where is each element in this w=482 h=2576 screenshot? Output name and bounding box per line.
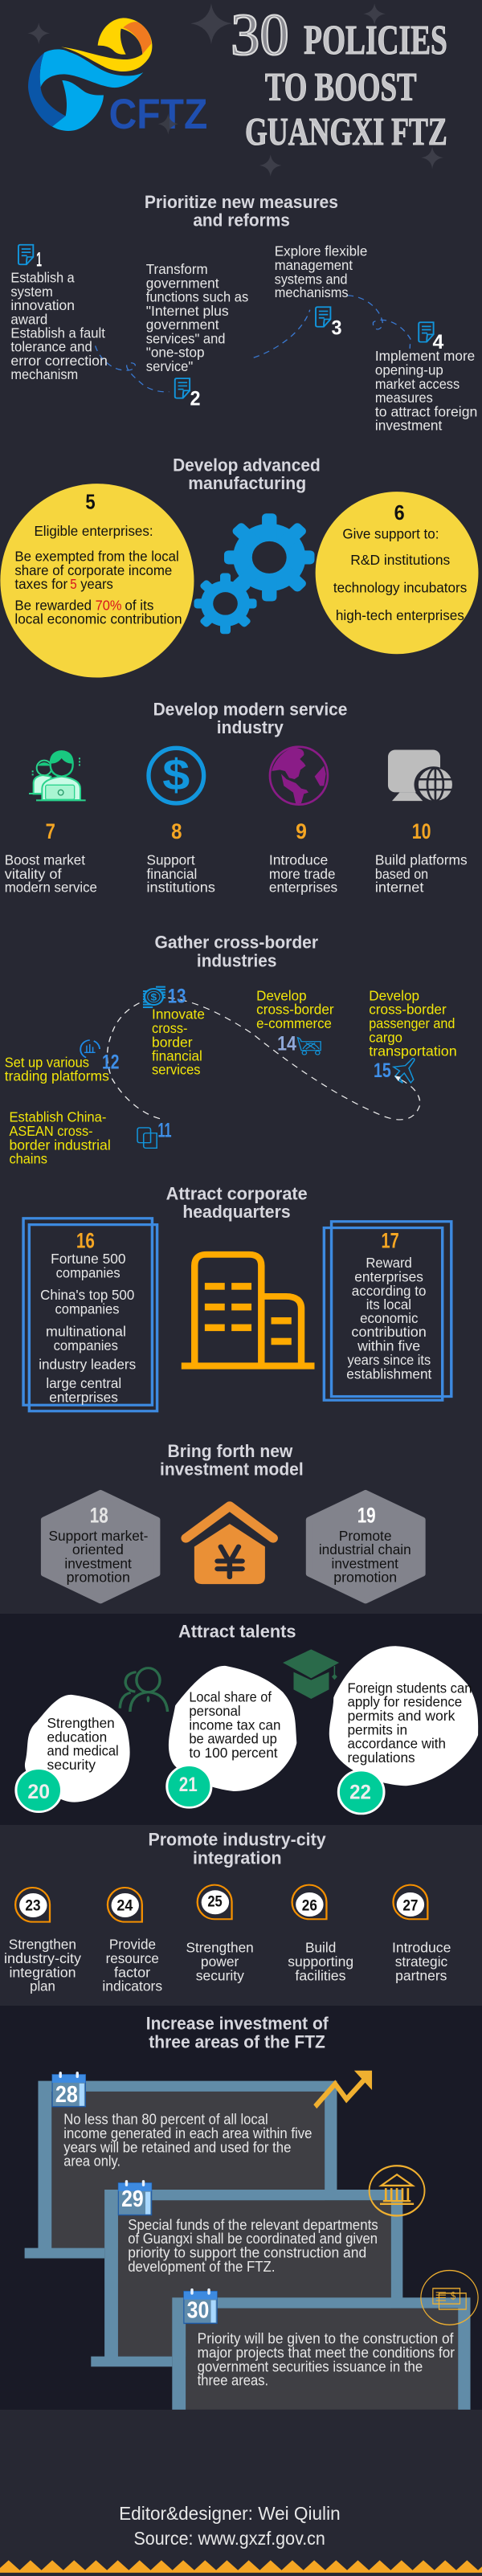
panel: policy 16: 16 bbox=[76, 1228, 95, 1252]
dashed connectors bbox=[96, 296, 411, 392]
item 3 bbox=[275, 243, 367, 339]
policy 27 bbox=[392, 1885, 451, 1984]
policy 11: 11 bbox=[157, 1118, 172, 1141]
item 2 bbox=[146, 262, 248, 410]
panel: policy 16: companies bbox=[56, 1264, 120, 1280]
panel: policy 16: companies bbox=[55, 1300, 119, 1317]
title bbox=[231, 2, 447, 153]
decorative stars bbox=[27, 3, 443, 177]
item 2: Transform bbox=[146, 262, 208, 278]
bubble: policy 21: be awarded up bbox=[189, 1731, 277, 1747]
logo: CFTZ swirl bbox=[28, 18, 207, 138]
panel: policy 30: government securities issuance in the bbox=[198, 2358, 423, 2375]
panel: policy 16: companies bbox=[54, 1337, 118, 1353]
icon: office buildings bbox=[182, 1255, 315, 1370]
item 4: opening-up bbox=[375, 363, 443, 378]
hexagon: policy 18: investment bbox=[64, 1555, 133, 1571]
heading: bring forth new investment model: investment model bbox=[160, 1459, 304, 1479]
service icons row bbox=[29, 747, 328, 805]
yellow circle: policy 5: of its bbox=[125, 597, 153, 613]
panel: policy 29: priority to support the construction and bbox=[128, 2244, 366, 2261]
bubble: policy 21 bbox=[167, 1666, 296, 1807]
policy 26 bbox=[288, 1885, 353, 1984]
bubble: policy 21: to 100 percent bbox=[189, 1745, 278, 1762]
item 4: investment bbox=[375, 418, 443, 434]
panel: policy 29: Special funds of the relevant departments bbox=[128, 2217, 378, 2233]
policy 9: 9 bbox=[296, 819, 307, 843]
policy 23: industry-city bbox=[4, 1950, 81, 1967]
item 2: government bbox=[146, 317, 219, 333]
yellow circle: policy 6: R&D institutions bbox=[350, 552, 450, 568]
last lines of service policies bbox=[5, 880, 424, 896]
policy 26: supporting bbox=[288, 1953, 353, 1970]
policy 25: power bbox=[201, 1953, 239, 1970]
policy 14: 14 bbox=[277, 1031, 297, 1055]
item 4: market access bbox=[375, 377, 460, 393]
policy 11: border industrial bbox=[9, 1137, 111, 1153]
item 4: 4 bbox=[432, 330, 444, 353]
policy 15: cross-border bbox=[369, 1002, 447, 1018]
yellow circle: policy 5: Eligible enterprises: bbox=[34, 523, 153, 539]
heading: gather cross-border industries: industries bbox=[197, 952, 276, 971]
policy 15 bbox=[369, 988, 457, 1083]
bubble: policy 22: 22 bbox=[349, 1780, 371, 1803]
policy 25 bbox=[186, 1885, 254, 1984]
panel: policy 17 bbox=[324, 1222, 451, 1400]
bubble: policy 21: income tax can bbox=[189, 1717, 280, 1733]
heading: prioritize new measures: and reforms bbox=[193, 210, 290, 230]
bubble: policy 22: permits and work bbox=[347, 1708, 455, 1725]
policy 25: 25 bbox=[207, 1893, 223, 1910]
icon: bank bbox=[370, 2166, 425, 2215]
section: cross-border industries bbox=[5, 880, 457, 1167]
policy 26: 26 bbox=[302, 1897, 317, 1914]
bubble: policy 22 bbox=[329, 1646, 478, 1814]
credits bbox=[119, 2505, 341, 2549]
panel: policy 17: establishment bbox=[346, 1366, 432, 1382]
icon: rising arrow bbox=[315, 2071, 372, 2107]
heading: bring forth new investment model: Bring forth new bbox=[168, 1441, 293, 1461]
heading: develop advanced manufacturing: Develop advanced bbox=[173, 455, 321, 475]
panel: policy 17: years since its bbox=[347, 1351, 431, 1368]
panel: policy 30: Priority will be given to the construction of bbox=[198, 2330, 454, 2347]
panel: policy 16: multinational bbox=[46, 1323, 126, 1339]
bubble: policy 22: accordance with bbox=[347, 1736, 446, 1752]
heading: attract corporate headquarters bbox=[166, 1183, 308, 1222]
policy 15: 15 bbox=[374, 1059, 391, 1082]
dashed route bbox=[108, 998, 420, 1120]
item 4 bbox=[375, 322, 477, 434]
item 3: mechanisms bbox=[275, 285, 349, 301]
yellow circle: policy 5: Be rewarded bbox=[14, 597, 92, 613]
item 1: innovation bbox=[10, 298, 75, 314]
hexagon: policy 19 bbox=[309, 1493, 423, 1601]
item 2: 2 bbox=[190, 387, 201, 410]
policy 13 bbox=[143, 984, 205, 1078]
policy 24: factor bbox=[114, 1964, 151, 1981]
policy 9: Introduce bbox=[269, 851, 328, 868]
policy 23: 23 bbox=[25, 1897, 41, 1914]
policy 24: indicators bbox=[102, 1978, 162, 1994]
policy 11: chains bbox=[9, 1151, 47, 1167]
panel: policy 29: 29 bbox=[121, 2186, 144, 2212]
icon: dollar bbox=[149, 748, 204, 803]
policy 23: plan bbox=[30, 1978, 55, 1994]
policy 23 bbox=[4, 1888, 81, 1994]
hexagon: policy 19: Promote bbox=[339, 1527, 392, 1544]
panel: policy 30: three areas. bbox=[198, 2372, 268, 2389]
policy 7: vitality of bbox=[5, 865, 62, 882]
yellow circle: policy 5: 5 bbox=[85, 490, 96, 513]
panel: policy 17: according to bbox=[352, 1282, 426, 1299]
policy 10 bbox=[375, 819, 468, 882]
yellow circle: policy 5: share of corporate income bbox=[14, 562, 172, 578]
policy 13: border bbox=[152, 1035, 193, 1051]
panel: policy 17: its local bbox=[366, 1296, 411, 1312]
panel: policy 17: Reward bbox=[366, 1254, 412, 1271]
heading: attract corporate headquarters: headquarters bbox=[182, 1202, 291, 1222]
policy 15: Develop bbox=[369, 988, 419, 1004]
item 2: functions such as bbox=[146, 290, 248, 305]
policy 13: services bbox=[152, 1062, 201, 1078]
hexagon: policy 19: industrial chain bbox=[319, 1541, 411, 1557]
policy 26: Build bbox=[305, 1940, 336, 1956]
panel: policy 28: area only. bbox=[63, 2153, 120, 2170]
hexagon: policy 19: investment bbox=[332, 1555, 399, 1571]
policy 23: integration bbox=[9, 1964, 76, 1981]
heading: increase investment bbox=[146, 2015, 329, 2052]
icon: gears bbox=[180, 496, 336, 646]
panel: policy 17: contribution bbox=[351, 1324, 427, 1340]
item 1: Establish a fault bbox=[10, 325, 106, 341]
policy 7: Boost market bbox=[5, 851, 86, 868]
panel: policy 16: China's top 500 bbox=[40, 1286, 134, 1303]
item 1: Establish a bbox=[10, 270, 75, 286]
panel: policy 29: of Guangxi shall be coordinated and given bbox=[128, 2231, 378, 2247]
bubble: policy 20: security bbox=[47, 1757, 96, 1774]
heading: attract talents: Attract talents bbox=[178, 1623, 296, 1642]
policy 7: 7 bbox=[46, 819, 55, 843]
bubble: policy 20: and medical bbox=[47, 1743, 119, 1759]
bubble: policy 20: education bbox=[47, 1729, 107, 1745]
panel: policy 16 bbox=[23, 1219, 157, 1411]
panel: policy 17: economic bbox=[360, 1310, 418, 1326]
policy 14: e-commerce bbox=[256, 1015, 332, 1032]
item 3: Explore flexible bbox=[275, 243, 367, 259]
policy 9 bbox=[269, 819, 336, 882]
policy 15: cargo bbox=[369, 1030, 402, 1046]
heading: prioritize new measures bbox=[145, 192, 338, 230]
yellow circle: policy 6: technology incubators bbox=[333, 579, 467, 595]
panel: policy 28: years will be retained and used for the bbox=[63, 2139, 291, 2156]
bubble: policy 20 bbox=[16, 1695, 130, 1812]
heading: promote industry-city integration: Promote industry-city bbox=[148, 1831, 326, 1850]
heading: develop modern service industry bbox=[153, 699, 347, 737]
policy 12: 12 bbox=[102, 1050, 119, 1073]
hexagon: policy 19: promotion bbox=[333, 1569, 397, 1585]
hexagon: policy 18: 18 bbox=[90, 1504, 108, 1527]
icon: cheque bbox=[421, 2271, 478, 2325]
yellow circle: policy 5: 5 bbox=[70, 576, 77, 592]
policy 27: strategic bbox=[395, 1953, 447, 1970]
item 1: award bbox=[10, 312, 47, 328]
panel: policy 30 bbox=[172, 2288, 471, 2410]
policy 12: Set up various bbox=[5, 1055, 89, 1071]
item 2: government bbox=[146, 276, 219, 292]
hexagon: policy 19: 19 bbox=[357, 1504, 376, 1527]
item 1: system bbox=[10, 284, 53, 300]
policy 24: 24 bbox=[116, 1897, 133, 1914]
yellow circle: policy 5: taxes for bbox=[14, 576, 67, 592]
panel: policy 16: enterprises bbox=[49, 1389, 118, 1405]
panel: policy 17: 17 bbox=[382, 1228, 399, 1252]
section: investment of three areas and credits bbox=[0, 2015, 482, 2573]
panel: policy 30: major projects that meet the conditions for bbox=[198, 2345, 455, 2361]
policy 10: 10 bbox=[412, 819, 431, 843]
policy 8: financial bbox=[147, 865, 197, 882]
credits: Source: www.gxzf.gov.cn bbox=[133, 2529, 325, 2549]
policy 24: Provide bbox=[109, 1937, 156, 1953]
heading: promote industry-city integration: integration bbox=[193, 1849, 282, 1868]
policy 27: Introduce bbox=[392, 1940, 451, 1956]
policy 27: partners bbox=[395, 1967, 447, 1984]
heading: bring forth new investment model bbox=[160, 1441, 304, 1479]
item 1: error correction bbox=[10, 353, 108, 369]
policy 13: $ bbox=[151, 991, 157, 1002]
policy 10: Build platforms bbox=[375, 851, 468, 868]
item 3: 3 bbox=[332, 316, 342, 339]
last lines of service policies: enterprises bbox=[269, 880, 337, 896]
policy 15: transportation bbox=[369, 1043, 457, 1059]
policy 24 bbox=[102, 1888, 162, 1994]
credits: Editor&designer: Wei Qiulin bbox=[119, 2505, 341, 2525]
policy 11: ASEAN cross- bbox=[9, 1123, 93, 1140]
policy 9: more trade bbox=[269, 865, 336, 882]
icon: customer service people bbox=[29, 751, 86, 800]
policy 12 bbox=[5, 1040, 119, 1084]
heading: develop advanced manufacturing bbox=[173, 455, 321, 493]
yellow circle: policy 6: Give support to: bbox=[342, 525, 439, 542]
yellow circle: policy 6 bbox=[316, 492, 478, 654]
bubble: policy 22: regulations bbox=[347, 1749, 415, 1766]
bubble: policy 20: Strengthen bbox=[47, 1715, 115, 1732]
item 2: service" bbox=[146, 359, 193, 375]
yellow circle: policy 5: years bbox=[80, 576, 113, 592]
section: advanced manufacturing and modern service bbox=[0, 455, 478, 882]
hexagon: policy 18: Support market- bbox=[48, 1527, 148, 1544]
policy 10: based on bbox=[375, 865, 428, 882]
panel: policy 28 bbox=[25, 2072, 337, 2258]
logo: CFTZ swirl: CFTZ bbox=[109, 91, 207, 138]
last lines of service policies: modern service bbox=[5, 880, 97, 896]
section: talents and industry-city integration bbox=[4, 1623, 478, 1994]
bubble: policy 20: 20 bbox=[27, 1780, 50, 1803]
panel: policy 29 bbox=[91, 2180, 402, 2366]
heading: develop modern service industry: Develop modern service bbox=[153, 699, 347, 719]
icon: cheque: $ bbox=[451, 2290, 456, 2302]
policy 23: Strengthen bbox=[9, 1937, 76, 1953]
heading: develop advanced manufacturing: manufacturing bbox=[188, 473, 306, 493]
item 1 bbox=[10, 245, 108, 383]
panel: policy 16: large central bbox=[46, 1374, 121, 1391]
policy 25: Strengthen bbox=[186, 1940, 254, 1956]
policy 13: 13 bbox=[168, 984, 186, 1007]
policy 14 bbox=[256, 988, 334, 1055]
policy 7 bbox=[5, 819, 86, 882]
policy 26: facilities bbox=[295, 1967, 346, 1984]
panel: policy 16: industry leaders bbox=[39, 1356, 136, 1372]
policy 13: cross- bbox=[152, 1020, 187, 1037]
policy 12: trading platforms bbox=[5, 1068, 109, 1084]
yellow circle: policy 5: Be exempted from the local bbox=[14, 548, 179, 564]
bubble: policy 21: personal bbox=[189, 1703, 241, 1720]
item 2: "one-stop bbox=[146, 345, 204, 361]
panel: policy 28: 28 bbox=[55, 2081, 78, 2108]
last lines of service policies: internet bbox=[375, 880, 424, 896]
title: 30 bbox=[231, 2, 289, 67]
icon: people outline bbox=[120, 1668, 168, 1712]
yellow circle: policy 5 bbox=[0, 484, 194, 678]
item 3: management bbox=[275, 258, 353, 274]
heading: gather cross-border industries bbox=[154, 933, 318, 971]
panel: policy 30: 30 bbox=[187, 2297, 209, 2323]
bubble: policy 22: permits in bbox=[347, 1722, 407, 1738]
icon: dollar: $ bbox=[162, 749, 190, 799]
heading: attract corporate headquarters: Attract corporate bbox=[166, 1183, 308, 1203]
policy 13: Innovate bbox=[152, 1006, 205, 1023]
item 3: systems and bbox=[275, 271, 347, 288]
policy 8: Support bbox=[147, 851, 195, 868]
yellow circle: policy 6: high-tech enterprises bbox=[336, 607, 464, 623]
panel: policy 28: No less than 80 percent of all local bbox=[63, 2111, 268, 2128]
panel: policy 16: Fortune 500 bbox=[51, 1250, 126, 1267]
policy 8: 8 bbox=[171, 819, 182, 843]
bubble: policy 21: Local share of bbox=[189, 1689, 272, 1705]
icon: house with yen bbox=[186, 1506, 273, 1584]
yellow circle: policy 6: 6 bbox=[394, 501, 405, 525]
item 2: services" and bbox=[146, 331, 226, 347]
heading: develop modern service industry: industry bbox=[217, 717, 284, 737]
yellow circle: policy 5: local economic contribution bbox=[14, 610, 182, 627]
zigzag footer border bbox=[0, 2560, 482, 2573]
heading: gather cross-border industries: Gather cross-border bbox=[154, 933, 318, 953]
icon: globe bbox=[270, 747, 328, 805]
policy 24: resource bbox=[106, 1950, 159, 1967]
policy 14: Develop bbox=[256, 988, 307, 1004]
bubble: policy 21: 21 bbox=[179, 1773, 198, 1796]
item 1: mechanism bbox=[10, 367, 78, 383]
panel: policy 29: development of the FTZ. bbox=[128, 2259, 276, 2275]
hexagon: policy 18: oriented bbox=[72, 1541, 124, 1557]
heading: increase investment: three areas of the FTZ bbox=[149, 2033, 325, 2052]
panel: policy 17: within five bbox=[357, 1337, 420, 1354]
icon: graduation cap bbox=[283, 1649, 339, 1699]
icon: internet platform bbox=[388, 750, 453, 802]
header: title and first section bbox=[10, 2, 477, 434]
policy 13: financial bbox=[152, 1048, 202, 1064]
hexagon: policy 18: promotion bbox=[67, 1569, 130, 1585]
heading: promote industry-city integration bbox=[148, 1831, 326, 1868]
policy 11: Establish China- bbox=[9, 1109, 106, 1125]
panel: policy 17: enterprises bbox=[354, 1268, 423, 1284]
policy 8 bbox=[147, 819, 197, 882]
yellow circle: policy 5: 70% bbox=[96, 597, 122, 613]
policy 25: security bbox=[196, 1967, 244, 1984]
section: corporate headquarters and investment model bbox=[23, 1183, 451, 1601]
item 1: tolerance and bbox=[10, 340, 92, 355]
policy 11 bbox=[9, 1109, 172, 1167]
policy 14: cross-border bbox=[256, 1002, 334, 1018]
item 2: "Internet plus bbox=[146, 304, 229, 320]
hexagon: policy 18 bbox=[44, 1493, 157, 1601]
heading: increase investment: Increase investment of bbox=[146, 2015, 329, 2034]
panel: policy 28: income generated in each area within five bbox=[63, 2125, 312, 2141]
last lines of service policies: institutions bbox=[147, 880, 215, 896]
policy 27: 27 bbox=[402, 1897, 418, 1914]
heading: prioritize new measures: Prioritize new measures bbox=[145, 192, 338, 212]
item 1: 1 bbox=[36, 248, 42, 271]
policy 15: passenger and bbox=[369, 1015, 455, 1032]
item 4: measures bbox=[375, 390, 433, 406]
